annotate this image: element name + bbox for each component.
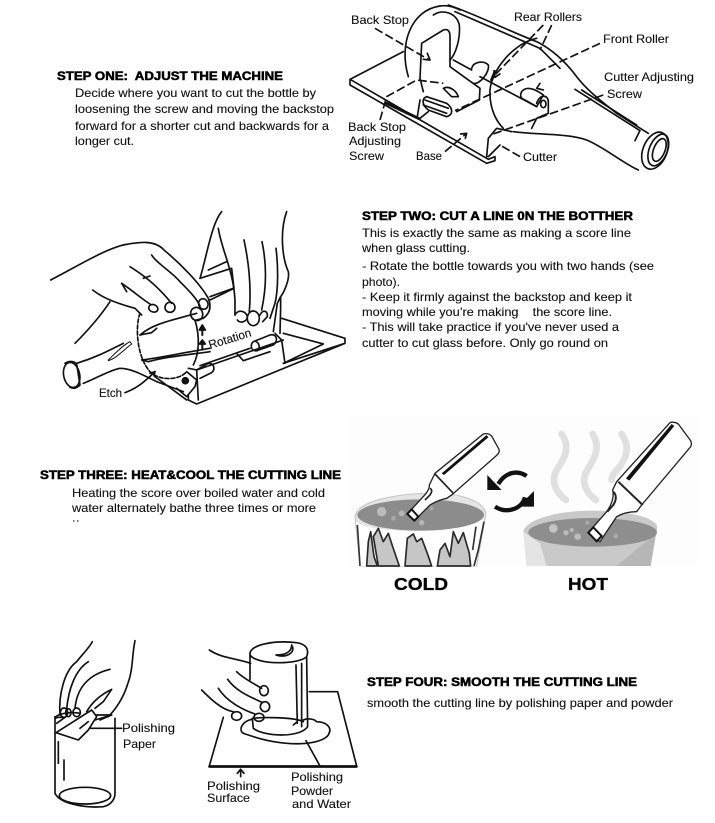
text block: step two body: when glass cutting. [361, 241, 470, 255]
text block: step one body: longer cut. [75, 134, 134, 148]
text block: step three body [71, 486, 325, 522]
text block: step two body: cutter to cut glass before. Only go round on [362, 336, 608, 350]
label: HOT: HOT [568, 574, 608, 594]
label: Back Stop Adjusting Screw: Adjusting [349, 134, 401, 148]
hot bucket [523, 511, 657, 566]
label: Polishing Powder and Water [291, 770, 351, 811]
text block: step one body: loosening the screw and moving the backstop [75, 102, 334, 116]
label: Etch: Etch [99, 386, 122, 400]
heading: step two: STEP TWO: CUT A LINE 0N THE BOTTHER [362, 211, 634, 223]
heading: step three: STEP THREE: HEAT&COOL THE CUTTING LINE [40, 470, 341, 482]
text block: step four body: smooth the cutting line by polishing paper and powder [367, 696, 673, 710]
illustration: cold and hot water baths [350, 417, 697, 567]
text block: step three body: Heating the score over boiled water and cold [72, 486, 325, 500]
text block: step one body: forward for a shorter cut and backwards for a [75, 119, 329, 133]
text block: step one body: Decide where you want to cut the bottle by [75, 86, 316, 100]
label: Cutter Adjusting Screw: Cutter Adjusting [604, 70, 694, 84]
label: Back Stop Adjusting Screw [348, 120, 406, 163]
text block: step two body: - Keep it firmly against the backstop and keep it [362, 290, 633, 304]
label: Polishing Paper: Paper [123, 737, 156, 751]
heading: step one: STEP ONE: ADJUST THE MACHINE [57, 71, 283, 83]
label: Cutter Adjusting Screw: Screw [607, 87, 642, 101]
label: Polishing Powder and Water: Polishing [291, 770, 343, 784]
text block: step two body: - Rotate the bottle towards you with two hands (see [362, 259, 654, 273]
label: Cutter: Cutter [523, 150, 557, 164]
illustration: polishing on surface [202, 642, 357, 777]
label: Polishing Surface: Polishing [207, 779, 260, 793]
label: Polishing Powder and Water: and Water [292, 797, 351, 811]
cold bottle [407, 434, 499, 521]
label: Polishing Powder and Water: Powder [291, 784, 333, 798]
hot bottle [588, 422, 691, 542]
steam [554, 434, 627, 500]
text block: step three body: water alternately bathe three times or more [71, 501, 316, 515]
heading: step four: STEP FOUR: SMOOTH THE CUTTING LINE [367, 677, 637, 689]
label: Polishing Paper [122, 721, 175, 751]
label: Base: Base [416, 149, 442, 163]
label: Rear Rollers: Rear Rollers [514, 10, 582, 24]
text block: step two body: This is exactly the same as making a score line [362, 226, 631, 240]
illustration: polishing paper on glass [55, 641, 135, 807]
illustration: hands rotating bottle in cutter [51, 212, 345, 404]
label: Polishing Surface [207, 779, 260, 805]
label: Back Stop: Back Stop [351, 13, 409, 27]
label: Polishing Paper: Polishing [122, 721, 175, 735]
label: Polishing Surface: Surface [207, 791, 250, 805]
cold bucket [355, 493, 486, 566]
text block: step two body: - This will take practice if you've never used a [362, 320, 619, 334]
label: COLD: COLD [394, 574, 448, 594]
label: Back Stop Adjusting Screw: Screw [349, 149, 384, 163]
text block: step one body [75, 86, 334, 148]
text block: step two body [361, 226, 654, 350]
icon: swap arrows [487, 473, 534, 510]
label: Front Roller: Front Roller [603, 32, 669, 46]
illustration: bottle cutting machine diagram [350, 5, 673, 173]
text block: step two body: moving while you’re making the score line. [362, 305, 612, 319]
label: Back Stop Adjusting Screw: Back Stop [348, 120, 406, 134]
text block: step two body: photo). [362, 275, 400, 289]
label: Cutter Adjusting Screw [604, 70, 694, 101]
label: Rotation: Rotation [207, 326, 253, 352]
